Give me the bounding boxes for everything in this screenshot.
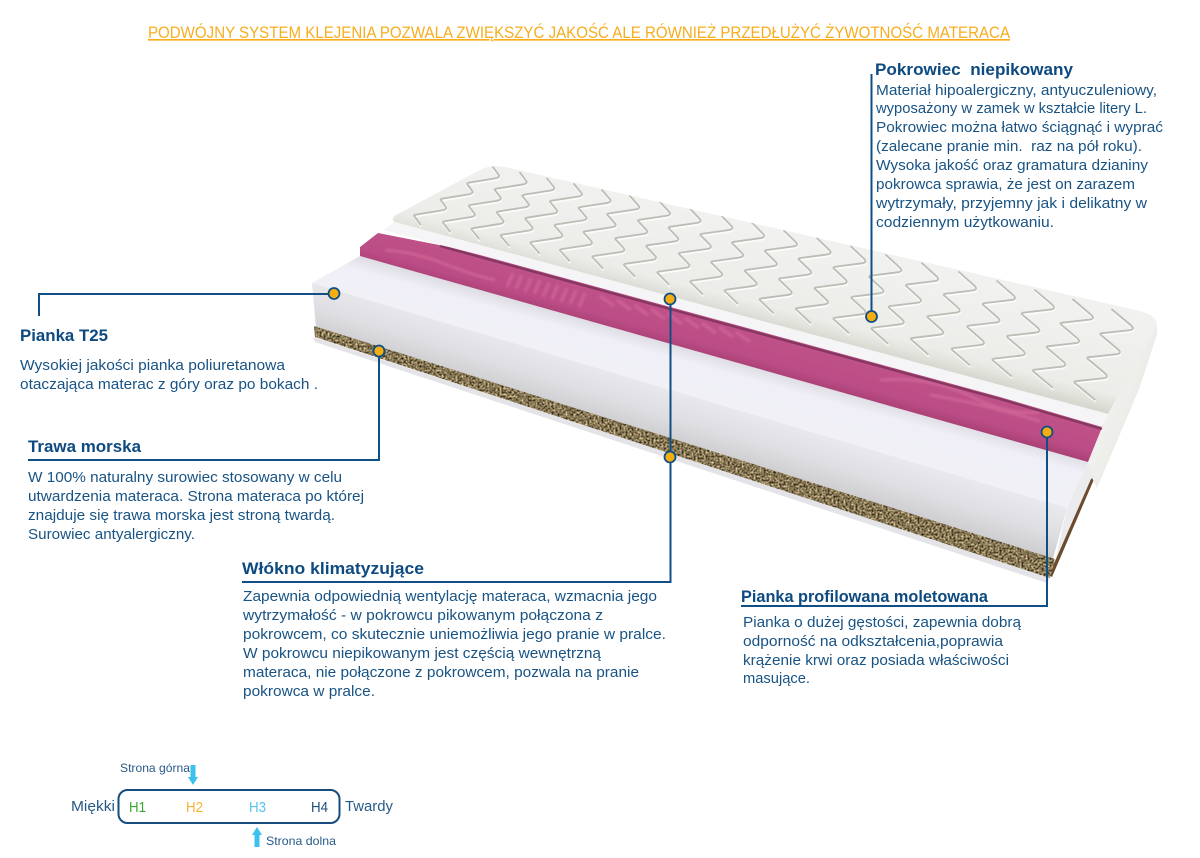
- panel: Pianka profilowana moletowana: [741, 426, 1052, 687]
- body text: cover description: Pokrowiec można łatwo ściągnąć i wyprać: [876, 119, 1164, 136]
- heading: Trawa morska: Trawa morska: [28, 438, 142, 456]
- body text: T25 description: [20, 357, 318, 393]
- body text: climate fibre description: materaca, nie połączone z pokrowcem, pozwala na pranie: [243, 664, 639, 681]
- body text: climate fibre description: pokrowca w pralce.: [243, 683, 375, 700]
- cover right side: [1088, 322, 1157, 488]
- hardness scale: [71, 761, 393, 848]
- scale frame: [118, 790, 340, 823]
- body text: profiled foam description: [743, 614, 1022, 687]
- label: Strona dolna: Strona dolna: [266, 834, 336, 848]
- body text: climate fibre description: W pokrowcu niepikowanym jest częścią wewnętrzną: [243, 645, 602, 662]
- body text: cover description: wyposażony w zamek w kształcie litery L.: [875, 100, 1147, 117]
- heading: Pianka T25: Pianka T25: [20, 327, 108, 345]
- body text: seagrass description: utwardzenia materaca. Strona materaca po której: [28, 488, 364, 505]
- body text: cover description: [875, 82, 1164, 231]
- body text: cover description: Materiał hipoalergiczny, antyuczuleniowy,: [876, 82, 1157, 99]
- body text: climate fibre description: wytrzymałość - w pokrowcu pikowanym połączona z: [242, 607, 603, 624]
- mattress illustration: [312, 166, 1200, 583]
- body text: cover description: codziennym użytkowaniu.: [876, 214, 1054, 231]
- body text: seagrass description: [28, 469, 364, 543]
- heading: Włókno klimatyzujące: Włókno klimatyzujące: [242, 560, 424, 578]
- quilted cover top: [391, 166, 1200, 414]
- label: H4: H4: [311, 800, 328, 816]
- leader line: profiled foam: [741, 426, 1052, 606]
- profiled pink foam: [360, 233, 1105, 462]
- seagrass layer: [314, 326, 1055, 578]
- panel: Pianka T25: [20, 288, 340, 393]
- heading: Pokrowiec niepikowany: Pokrowiec niepikowany: [875, 61, 1074, 79]
- brown back edge of seagrass: [1049, 477, 1095, 577]
- label: Twardy: Twardy: [345, 798, 393, 815]
- label: H2: H2: [186, 800, 203, 816]
- panel: Trawa morska: [28, 346, 384, 543]
- label: Miękki: Miękki: [71, 798, 115, 815]
- body text: climate fibre description: Zapewnia odpowiednią wentylację materaca, wzmacnia jego: [243, 588, 657, 605]
- label: H1: H1: [129, 800, 146, 816]
- label: Strona górna: Strona górna: [120, 761, 190, 775]
- body text: profiled foam description: krążenie krwi oraz posiada właściwości: [743, 652, 1009, 669]
- body text: climate fibre description: [242, 588, 666, 700]
- body text: T25 description: otaczająca materac z góry oraz po bokach .: [20, 376, 318, 393]
- leader line: T25 foam: [39, 288, 340, 316]
- body text: climate fibre description: pokrowcem, co skutecznie uniemożliwia jego pranie w pralce.: [243, 626, 666, 643]
- body text: cover description: (zalecane pranie min. raz na pół roku).: [876, 138, 1142, 155]
- body text: profiled foam description: odporność na odkształcenia,poprawia: [743, 633, 1004, 650]
- body text: cover description: wytrzymały, przyjemny jak i delikatny w: [875, 195, 1147, 212]
- body text: seagrass description: Surowiec antyalergiczny.: [28, 526, 195, 543]
- title: PODWÓJNY SYSTEM KLEJENIA POZWALA ZWIĘKSZYĆ JAKOŚĆ ALE RÓWNIEŻ PRZEDŁUŻYĆ ŻYWOTNOŚĆ MATERACA: [148, 23, 1010, 42]
- body text: cover description: pokrowca sprawia, że jest on zarazem: [876, 176, 1135, 193]
- foam end face: [1052, 462, 1095, 575]
- leader line: cover: [866, 74, 877, 322]
- floor shadow: [313, 337, 1050, 583]
- foam front face T25: [312, 283, 1067, 562]
- body text: seagrass description: W 100% naturalny surowiec stosowany w celu: [28, 469, 342, 486]
- body text: profiled foam description: Pianka o dużej gęstości, zapewnia dobrą: [743, 614, 1022, 631]
- leader line: climate fibre: [242, 294, 676, 582]
- arrow: bottom side: [252, 827, 262, 847]
- body text: T25 description: Wysokiej jakości pianka poliuretanowa: [20, 357, 286, 374]
- heading: Pianka profilowana moletowana: Pianka profilowana moletowana: [741, 588, 989, 606]
- foam top face: [312, 256, 1088, 508]
- panel: Pokrowiec niepikowany: [866, 61, 1164, 322]
- leader line: seagrass: [28, 346, 384, 460]
- cover white strip: [383, 222, 1108, 427]
- panel: Włókno klimatyzujące: [242, 294, 675, 700]
- label: H3: H3: [249, 800, 266, 816]
- body text: profiled foam description: masujące.: [743, 670, 810, 687]
- body text: seagrass description: znajduje się trawa morska jest stroną twardą.: [28, 507, 335, 524]
- body text: cover description: Wysoka jakość oraz gramatura dzianiny: [876, 157, 1149, 174]
- arrow: top side: [188, 765, 198, 785]
